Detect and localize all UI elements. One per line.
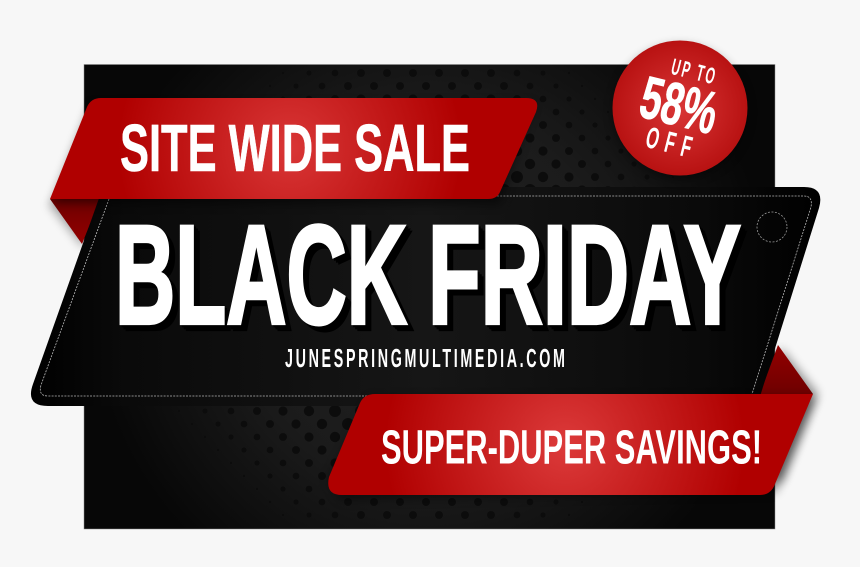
badge text: UP TO (669, 53, 718, 89)
top ribbon (50, 98, 537, 199)
bottom ribbon shadow (328, 398, 815, 500)
tag hole (757, 212, 787, 242)
discount badge (612, 40, 748, 179)
main tag panel (31, 187, 820, 406)
badge text: 58% (634, 63, 725, 147)
website url: JUNESPRINGMULTIMEDIA.COM (285, 345, 565, 373)
bottom ribbon (328, 394, 813, 495)
badge text: OFF (642, 121, 695, 165)
top ribbon fold shadow (48, 200, 100, 248)
headline: BLACK (115, 195, 407, 353)
halftone dots (84, 67, 775, 521)
bottom ribbon fold (760, 345, 813, 394)
bottom ribbon fold shadow (770, 347, 818, 482)
top ribbon shadow (52, 104, 533, 204)
top ribbon text: SITE WIDE SALE (120, 111, 470, 186)
dashed tag outline (40, 196, 811, 396)
top ribbon fold (50, 199, 100, 244)
badge text (628, 48, 729, 169)
background panel (84, 64, 775, 529)
